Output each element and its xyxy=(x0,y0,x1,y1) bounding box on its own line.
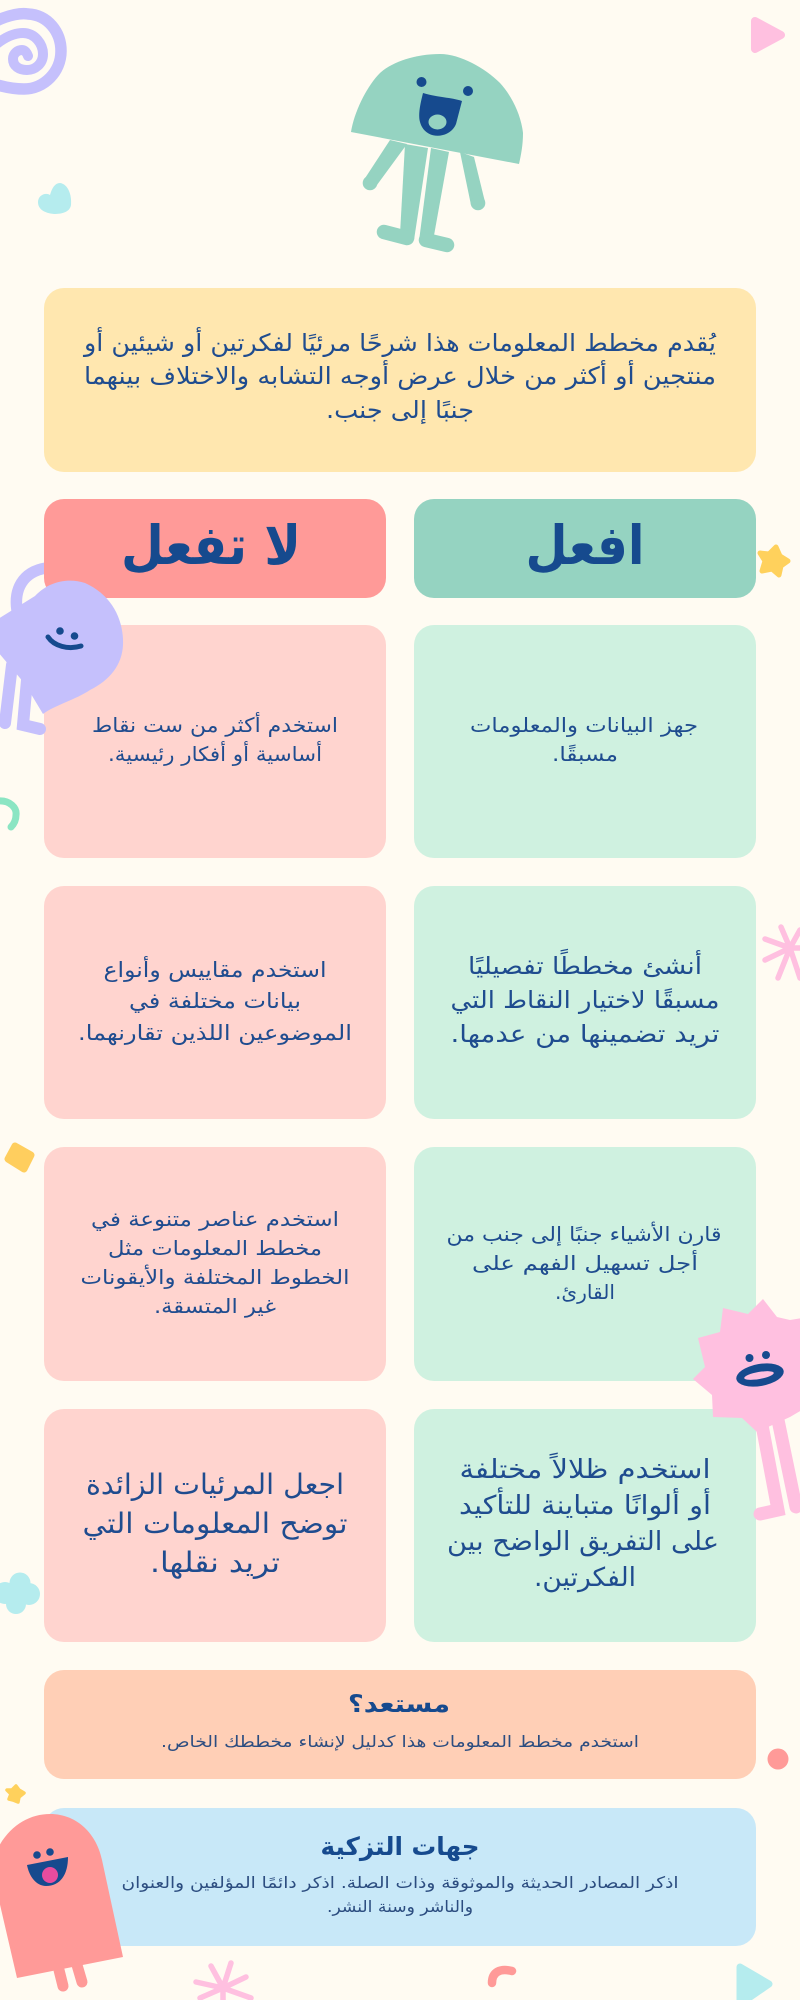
panel: dont 1: استخدم أكثر من ست نقاط xyxy=(92,712,338,737)
icon: small yellow star xyxy=(7,1786,24,1802)
icon: cyan triangle bottom xyxy=(740,1967,769,2000)
heading: do xyxy=(414,499,756,598)
icon: green arc xyxy=(0,801,16,827)
icon: coral dot xyxy=(768,1748,788,1770)
panel: do 1 xyxy=(414,625,756,858)
panel: ready xyxy=(44,1670,756,1779)
panel: dont 3 xyxy=(44,1147,386,1381)
heading: do not: لا تفعل xyxy=(121,514,301,577)
panel: do 4: استخدم ظلالاً مختلفة xyxy=(460,1452,710,1485)
panel: sources: جهات التزكية xyxy=(320,1832,480,1862)
panel: intro xyxy=(44,288,756,472)
mascot: coral popsicle xyxy=(0,1814,123,1986)
mascot: pink spiky monster xyxy=(693,1299,800,1514)
panel: ready: استخدم مخطط المعلومات هذا كدليل لإنشاء مخططك الخاص. xyxy=(161,1732,639,1752)
icon: purple spiral xyxy=(0,14,61,89)
panel: dont 4: توضح المعلومات التي xyxy=(82,1507,348,1540)
panel: do 3: قارن الأشياء جنبًا إلى جنب من xyxy=(446,1222,722,1247)
icon: pink triangle xyxy=(755,21,781,49)
panel: dont 4 xyxy=(44,1409,386,1642)
panel: do 3: القارئ. xyxy=(555,1280,615,1304)
panel: dont 1: أساسية أو أفكار رئيسية. xyxy=(108,741,322,766)
panel: do 4: أو ألوانًا متباينة للتأكيد xyxy=(459,1486,711,1521)
mascot: purple heart xyxy=(0,581,123,729)
panel: intro: منتجين أو أكثر من خلال عرض أوجه التشابه والاختلاف بينهما xyxy=(84,360,716,390)
panel: intro: جنبًا إلى جنب. xyxy=(326,396,474,425)
panel: do 1: جهز البيانات والمعلومات xyxy=(470,713,698,737)
panel: do 4 xyxy=(414,1409,756,1642)
panel: do 3 xyxy=(414,1147,756,1381)
panel: dont 3: مخطط المعلومات مثل xyxy=(108,1236,322,1260)
mascot: green jellyfish xyxy=(351,54,523,245)
panel: do 2: مسبقًا لاختيار النقاط التي xyxy=(450,986,720,1014)
panel: sources: اذكر المصادر الحديثة والموثوقة وذات الصلة. اذكر دائمًا المؤلفين والعنوان xyxy=(122,1873,678,1893)
icon: yellow star xyxy=(760,547,788,575)
panel: sources xyxy=(44,1808,756,1946)
icon: cyan flower xyxy=(0,1572,40,1614)
icon: pink asterisk right xyxy=(765,927,800,978)
panel: do 1: مسبقًا. xyxy=(552,742,618,766)
panel: dont 4: اجعل المرئيات الزائدة xyxy=(86,1468,344,1501)
panel: dont 2: استخدم مقاييس وأنواع xyxy=(104,956,326,982)
panel: do 4: الفكرتين. xyxy=(534,1563,636,1593)
panel: dont 2: بيانات مختلفة في xyxy=(129,989,301,1013)
icon: cyan heart xyxy=(38,183,71,214)
panel: dont 3: غير المتسقة. xyxy=(154,1294,276,1318)
icon: coral arc bottom xyxy=(492,1970,512,1983)
panel: do 2 xyxy=(414,886,756,1119)
panel: dont 4: تريد نقلها. xyxy=(150,1546,280,1579)
panel: dont 3: استخدم عناصر متنوعة في xyxy=(91,1207,339,1232)
icon: bottom pink asterisk xyxy=(196,1963,251,2000)
panel: dont 2 xyxy=(44,886,386,1119)
heading: do: افعل xyxy=(526,514,644,577)
panel: dont 1 xyxy=(44,625,386,858)
panel: dont 2: الموضوعين اللذين تقارنهما. xyxy=(78,1021,352,1045)
heading: do not xyxy=(44,499,386,598)
mascot part: purple handle xyxy=(16,568,46,610)
panel: do 3: أجل تسهيل الفهم على xyxy=(472,1250,698,1275)
panel: do 2: تريد تضمينها من عدمها. xyxy=(450,1020,720,1048)
panel: intro: يُقدم مخطط المعلومات هذا شرحًا مرئيًا لفكرتين أو شيئين أو xyxy=(83,327,717,357)
panel: do 2: أنشئ مخططًا تفصيليًا xyxy=(468,949,702,980)
icon: yellow diamond xyxy=(8,1146,31,1169)
panel: do 4: على التفريق الواضح بين xyxy=(447,1527,719,1557)
panel: ready: مستعد؟ xyxy=(348,1690,450,1718)
panel: sources: والناشر وسنة النشر. xyxy=(327,1897,473,1917)
panel: dont 3: الخطوط المختلفة والأيقونات xyxy=(80,1265,350,1289)
